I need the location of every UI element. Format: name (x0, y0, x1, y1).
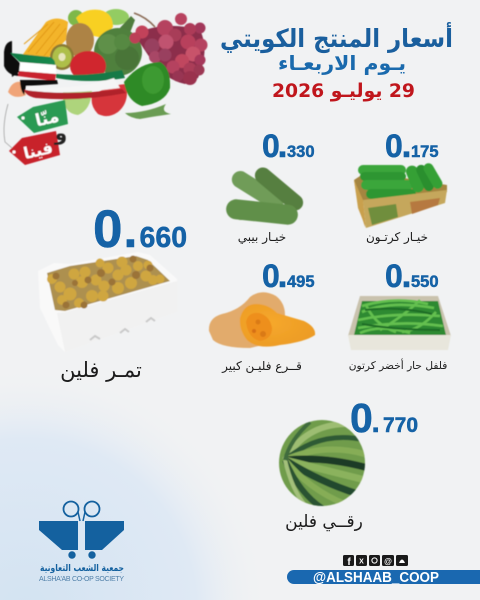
icon: cucumbers (225, 164, 306, 226)
icon: kiwi slice (50, 44, 74, 70)
price: . (278, 254, 288, 295)
product: baby cucumber (225, 124, 315, 245)
price: 660 (140, 222, 187, 254)
label: خيـار بيبي (238, 230, 286, 245)
title (220, 22, 453, 102)
price: 330 (287, 143, 315, 161)
social icons: f (347, 557, 351, 568)
title line 1: أسعار المنتج الكويتي (220, 22, 453, 54)
logo mark: cart and rings (39, 502, 124, 559)
price: . (372, 406, 380, 439)
icon: butternut squash (209, 292, 315, 348)
price: 770 (383, 414, 418, 437)
tag: red: فينا (22, 138, 55, 163)
tag: green: منّا (33, 107, 61, 131)
price: 550 (411, 273, 439, 291)
social icons: @ (384, 557, 392, 566)
icon: green apple (63, 90, 92, 115)
handle text: @ALSHAAB_COOP (313, 570, 439, 586)
logo (39, 502, 124, 583)
ribbon: Kuwait flag (4, 41, 126, 99)
icon: lettuce (68, 9, 129, 26)
tag: red (9, 131, 60, 165)
price: 0 (262, 128, 280, 164)
label: قــرع فليـن كبير (221, 359, 302, 374)
price: 0 (350, 395, 373, 441)
fruit basket illustration (4, 9, 208, 165)
label: تمـر فلين (60, 358, 142, 382)
conjunction glyph: و (54, 121, 67, 145)
price: . (402, 124, 412, 165)
product: dates foam box (38, 200, 187, 382)
icon: green pepper (124, 62, 170, 106)
price: . (278, 124, 288, 165)
price: . (402, 254, 412, 295)
icon: yellow pepper (76, 10, 113, 38)
product: watermelon (279, 395, 418, 532)
price: . (124, 202, 137, 258)
handle pill (287, 570, 480, 584)
price: 175 (411, 143, 439, 161)
icon: red apple (70, 51, 106, 81)
price: 0 (385, 258, 403, 294)
social icons: X (359, 558, 364, 566)
title line 3: date: 29 يوليـو 2026 (272, 80, 415, 102)
product: green chili carton (348, 254, 451, 372)
logo Arabic name: جمعية الشعب التعاونية (40, 563, 124, 574)
icon: chili box (348, 296, 451, 350)
price: 0 (93, 200, 122, 259)
icon: kiwi (66, 23, 94, 57)
icon: cucumber box (354, 161, 447, 228)
icon: watermelon (279, 420, 368, 510)
price: 495 (287, 273, 315, 291)
social icons (343, 555, 408, 568)
icon: peas (125, 104, 171, 119)
tag: green (17, 100, 68, 133)
icon: carrot (8, 82, 26, 97)
icon: red pepper (92, 84, 127, 116)
icon: broccoli (94, 16, 142, 76)
label: فلفل حار أخضر كرتون (349, 358, 447, 372)
icon: grapes (130, 13, 208, 85)
title line 2: يـوم الاربعـاء (278, 51, 406, 75)
label: رقــي فلين (285, 512, 363, 532)
icon: corn (19, 18, 68, 60)
label: خيـار كرتـون (366, 230, 428, 245)
product: cucumber carton (354, 124, 447, 245)
social media handle (287, 555, 480, 586)
product: large butternut squash (209, 254, 315, 374)
price: 0 (262, 258, 280, 294)
logo English name: ALSHA'AB CO-OP SOCIETY (39, 576, 124, 583)
price: 0 (385, 128, 403, 164)
icon: foam box of dates (38, 252, 177, 352)
